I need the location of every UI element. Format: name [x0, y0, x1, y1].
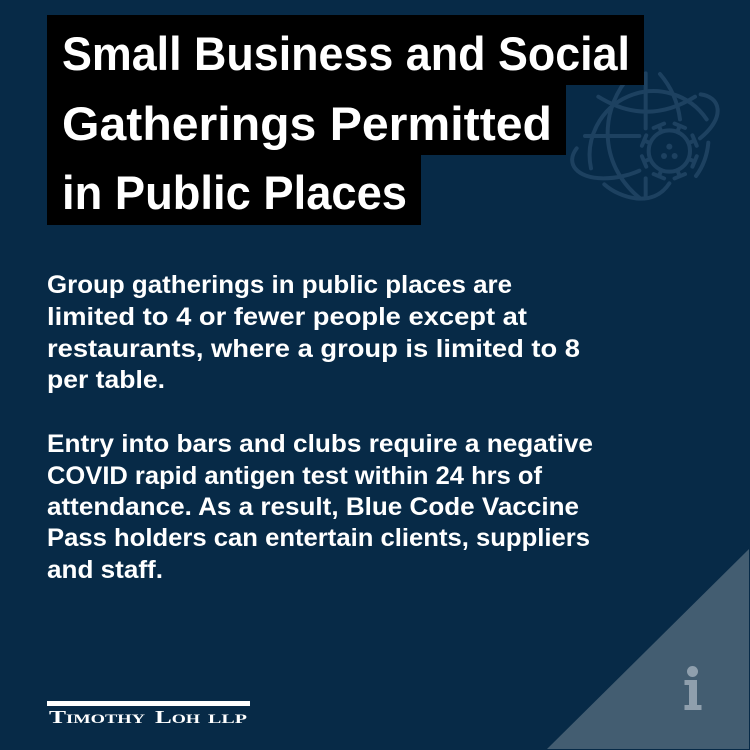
paragraph: bars and clubs: and staff. [47, 556, 163, 584]
paragraph: group gatherings: restaurants, where a group is limited to 8 [47, 335, 580, 363]
logo: Timothy Loh LLP: L OH [155, 707, 200, 727]
paragraph: bars and clubs: COVID rapid antigen test within 24 hrs of [47, 462, 543, 490]
paragraph: bars and clubs: attendance. As a result, Blue Code Vaccine [47, 493, 579, 521]
paragraph: group gatherings [47, 271, 580, 394]
logo: Timothy Loh LLP: T IMOTHY [49, 707, 146, 727]
paragraph: group gatherings: limited to 4 or fewer people except at [47, 303, 528, 331]
paragraph: group gatherings: Group gatherings in public places are [47, 271, 512, 299]
paragraph: bars and clubs [47, 430, 593, 584]
logo: Timothy Loh LLP: LLP [208, 711, 247, 726]
title [47, 15, 644, 225]
paragraph: bars and clubs: Pass holders can entertain clients, suppliers [47, 524, 590, 552]
icon: globe with virus [572, 73, 718, 199]
paragraph: bars and clubs: Entry into bars and clubs require a negative [47, 430, 593, 458]
title line 2: Gatherings Permitted [62, 97, 552, 150]
title line 3: in Public Places [62, 166, 407, 219]
logo: Timothy Loh LLP [47, 701, 250, 727]
paragraph: group gatherings: per table. [47, 366, 165, 394]
title line 1: Small Business and Social [62, 27, 630, 80]
icon: info [684, 666, 702, 710]
corner triangle panel [547, 549, 749, 749]
title highlight bars [47, 15, 644, 225]
